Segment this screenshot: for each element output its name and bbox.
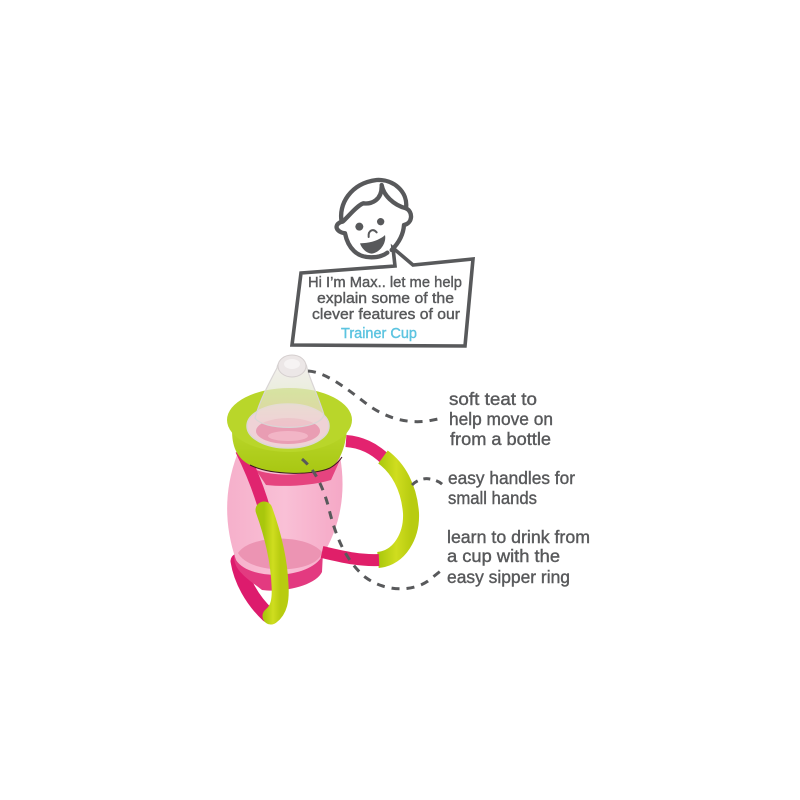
speech bubble <box>292 248 473 346</box>
label: sipper ring: a cup with the <box>447 546 560 566</box>
arrow: handles callout <box>412 479 443 485</box>
label: soft teat: from a bottle <box>450 429 551 449</box>
collar shadow line <box>250 457 342 473</box>
illustration: trainer cup <box>227 355 411 616</box>
cup top band <box>256 460 340 486</box>
right handle <box>322 441 411 560</box>
label: soft teat: help move on <box>449 409 553 429</box>
front handle <box>264 510 280 616</box>
front handle strap <box>241 450 265 511</box>
label: easy handles: easy handles for <box>448 468 575 488</box>
bubble text <box>308 274 462 342</box>
cup body <box>227 455 343 575</box>
cup base ring <box>234 552 323 591</box>
back handle <box>238 561 268 615</box>
cup liquid base <box>238 539 322 569</box>
bubble text: Trainer Cup <box>341 325 417 342</box>
bubble text: clever features of our <box>312 306 460 323</box>
teat <box>247 355 329 448</box>
bubble text: Hi I’m Max.. let me help <box>308 274 462 291</box>
arrow: sipper ring callout <box>302 459 443 589</box>
bubble text: explain some of the <box>317 290 454 307</box>
label: sipper ring <box>447 527 590 587</box>
label: easy handles: small hands <box>448 488 537 508</box>
sipper ring collar <box>232 430 347 473</box>
label: soft teat: soft teat to <box>449 389 537 409</box>
arrow: teat callout <box>308 371 443 422</box>
label: soft teat <box>449 389 553 449</box>
sipper ring flange <box>227 388 352 452</box>
icon: Max face <box>337 180 411 257</box>
label: easy handles <box>448 468 575 508</box>
label: sipper ring: learn to drink from <box>447 527 590 547</box>
label: sipper ring: easy sipper ring <box>447 567 570 587</box>
